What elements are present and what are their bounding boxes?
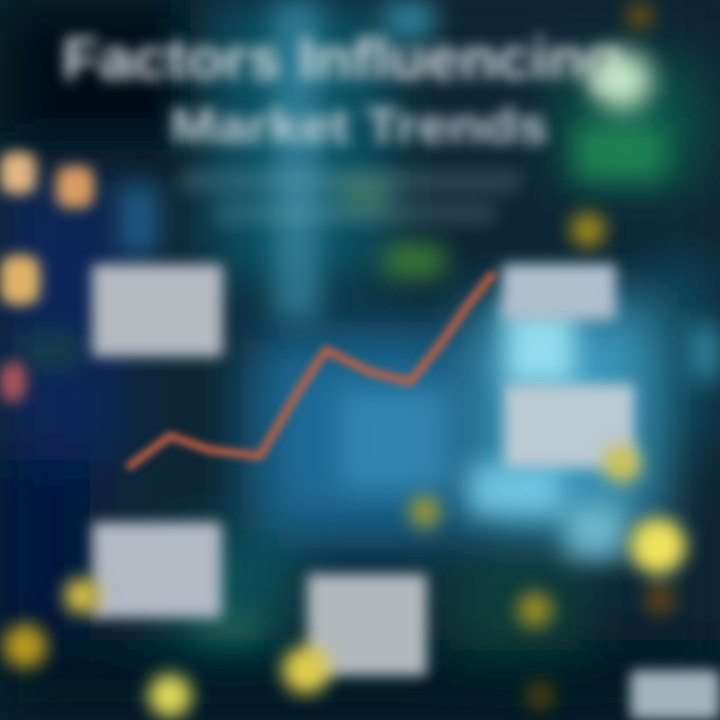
panel: middle right: [504, 384, 634, 468]
title line 1: Factors Influencing: [62, 26, 622, 92]
panel: lower left: [92, 522, 222, 618]
subtitle: [180, 170, 520, 223]
label: red stat: [0, 362, 26, 402]
panel: lower center: [307, 574, 427, 676]
panel: bottom right: [630, 670, 720, 720]
label: amber stat: [0, 255, 40, 305]
title: [62, 26, 622, 154]
left stat labels: [0, 152, 94, 402]
title line 2: Market Trends: [170, 98, 548, 154]
panel: upper right: [502, 264, 616, 320]
panel: upper left: [92, 264, 223, 357]
line chart: [130, 275, 492, 466]
pale green glow: [592, 50, 652, 110]
label: orange stat two: [56, 166, 94, 208]
label: orange stat one: [0, 152, 36, 194]
